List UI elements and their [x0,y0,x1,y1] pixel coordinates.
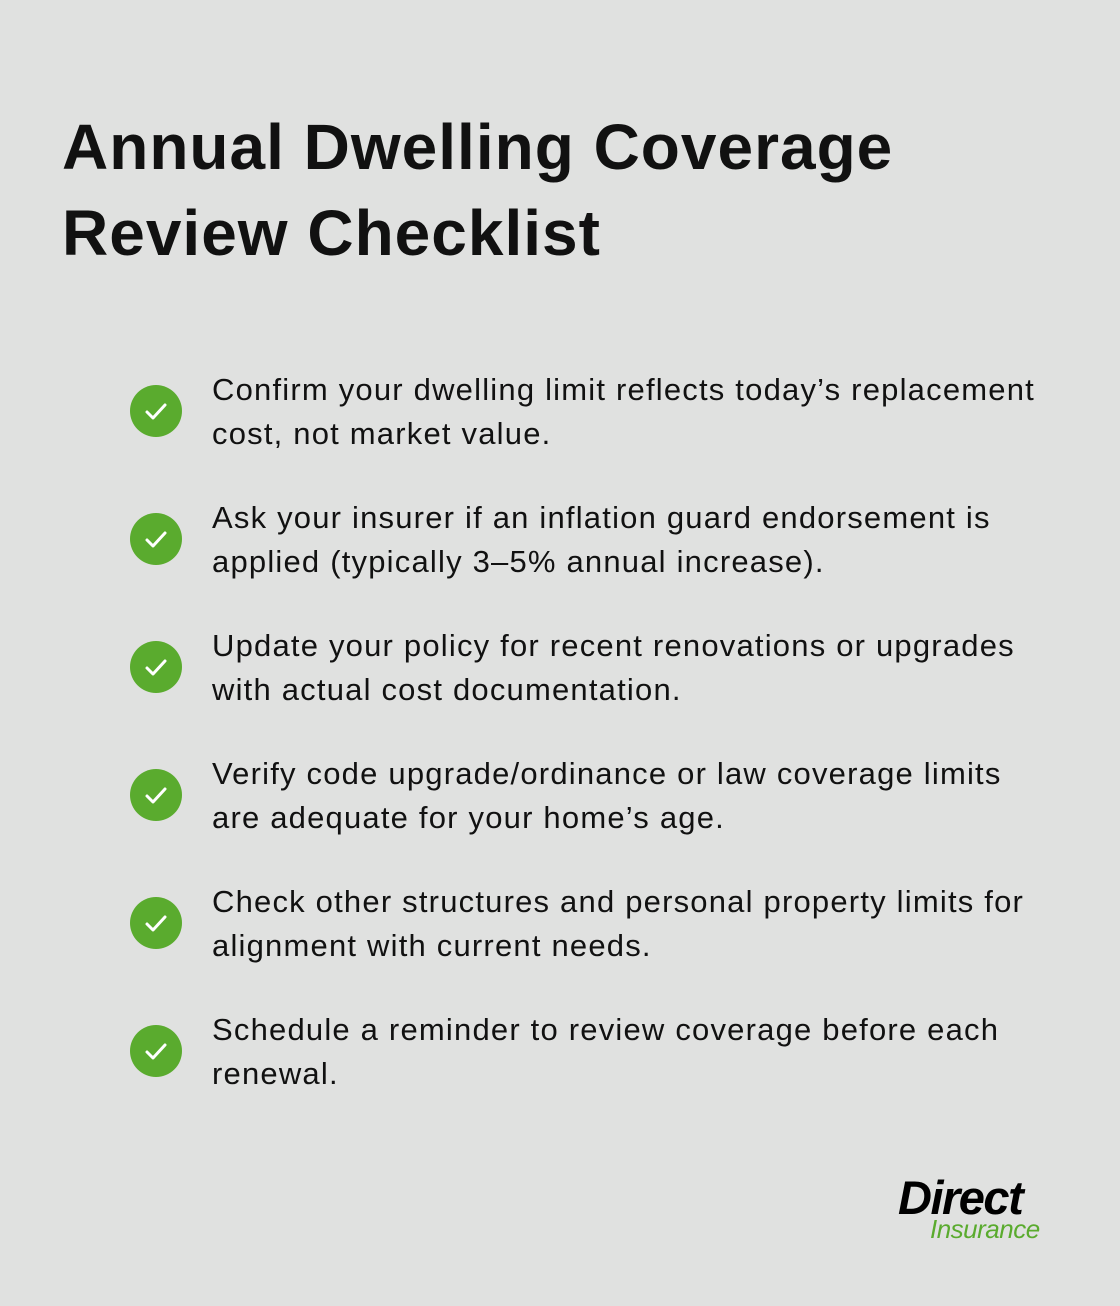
icon: check [130,769,182,821]
item 3 [130,628,1015,707]
text: alignment with current needs. [212,928,652,963]
title [62,111,893,269]
text [212,628,1015,707]
item 4 [130,756,1002,835]
text [212,372,1035,451]
text: with actual cost documentation. [212,672,682,707]
title: Annual Dwelling Coverage [62,111,893,183]
text: renewal. [212,1056,339,1091]
text: applied (typically 3–5% annual increase). [212,544,825,579]
text: Verify code upgrade/ordinance or law coverage limits [212,756,1002,791]
icon: check [130,513,182,565]
icon: check [130,641,182,693]
item 6 [130,1012,999,1091]
text [212,756,1002,835]
text [212,884,1024,963]
text [212,500,991,579]
text: Check other structures and personal property limits for [212,884,1024,919]
item 1 [130,372,1035,451]
item 5 [130,884,1024,963]
item 2 [130,500,991,579]
logo: Direct [898,1171,1022,1224]
icon: check [130,1025,182,1077]
text: cost, not market value. [212,416,551,451]
title: Review Checklist [62,197,601,269]
logo [898,1171,1040,1244]
icon: check [130,385,182,437]
text: Schedule a reminder to review coverage before each [212,1012,999,1047]
icon: check [130,897,182,949]
text [212,1012,999,1091]
logo: Insurance [930,1214,1040,1244]
text: Ask your insurer if an inflation guard endorsement is [212,500,991,535]
text: Update your policy for recent renovations or upgrades [212,628,1015,663]
text: Confirm your dwelling limit reflects today’s replacement [212,372,1035,407]
text: are adequate for your home’s age. [212,800,725,835]
